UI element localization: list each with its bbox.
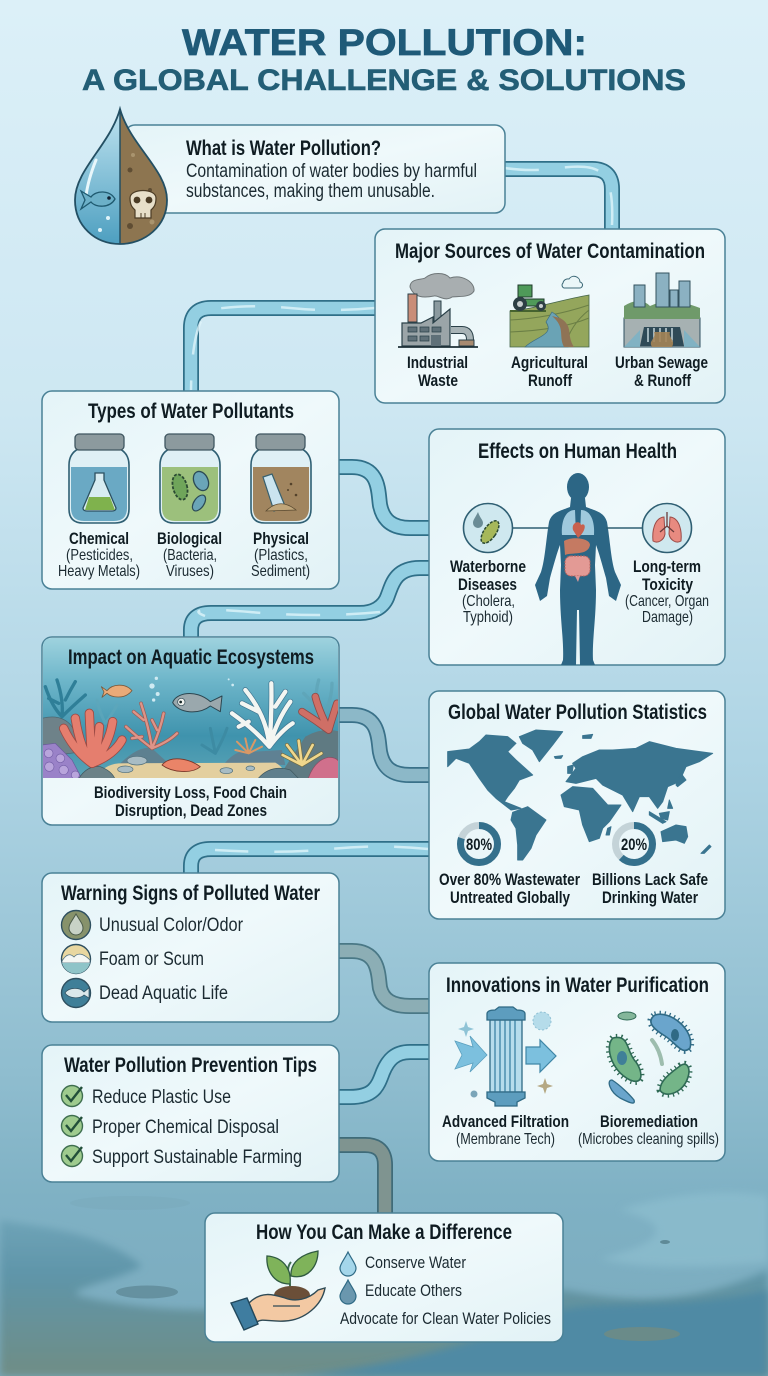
- pipe: sources to types: [191, 306, 378, 394]
- pipe: tips to difference: [336, 1145, 385, 1216]
- stat label: wastewater: Over 80% Wastewater: [439, 870, 580, 889]
- icon: lungs circle: [606, 504, 692, 552]
- pipe: warning signs to innovations: [336, 951, 432, 1006]
- text: advocate: Advocate for Clean Water Policies: [340, 1309, 551, 1328]
- panel: aquatic ecosystems: [42, 637, 340, 825]
- label: advanced filtration: Advanced Filtration: [442, 1112, 569, 1131]
- pipe: health to ecosystems: [191, 568, 432, 640]
- label: biological: [157, 529, 222, 580]
- label: advanced filtration: [442, 1112, 569, 1148]
- icon: urban sewage: [624, 273, 700, 347]
- icon: half clean half polluted water drop: [75, 109, 167, 244]
- pipe: ecosystems to statistics: [336, 715, 432, 775]
- icon: dark drop: [340, 1280, 356, 1304]
- label: biological: (Bacteria,: [163, 547, 217, 564]
- heading: health: Effects on Human Health: [478, 440, 677, 463]
- label: waterborne diseases: [450, 557, 526, 626]
- panel: types of pollutants: [42, 391, 339, 589]
- chart: 20 percent donut: 20%: [621, 835, 647, 854]
- label: long-term toxicity: (Cancer, Organ: [625, 593, 709, 610]
- heading: warning signs: Warning Signs of Polluted Water: [61, 882, 320, 905]
- label: waterborne diseases: Waterborne: [450, 557, 526, 576]
- panel: statistics: [429, 691, 725, 919]
- label: physical: Physical: [253, 529, 309, 548]
- heading: statistics: Global Water Pollution Statistics: [448, 701, 707, 724]
- text: farming: Support Sustainable Farming: [92, 1147, 302, 1168]
- panel: human health: [429, 429, 725, 665]
- label: agricultural runoff: Runoff: [528, 371, 572, 390]
- label: chemical: [58, 529, 140, 580]
- text: dead life: Dead Aquatic Life: [99, 983, 228, 1004]
- icon: bioremediation microbes: [609, 1012, 691, 1103]
- icon: hand holding seedling: [231, 1251, 325, 1330]
- label: urban sewage: & Runoff: [634, 371, 691, 390]
- caption: biodiversity: [94, 783, 287, 820]
- caption: biodiversity: Disruption, Dead Zones: [115, 801, 267, 820]
- icon: light drop: [340, 1252, 356, 1276]
- stat label: drinking water: Drinking Water: [602, 888, 698, 907]
- label: industrial waste: Industrial: [407, 353, 468, 372]
- panel: warning signs: [42, 873, 339, 1022]
- icon: check: [62, 1146, 82, 1166]
- icon: foam: [62, 944, 90, 974]
- heading: difference: How You Can Make a Difference: [256, 1221, 512, 1244]
- label: chemical: Chemical: [69, 529, 129, 548]
- heading: types: Types of Water Pollutants: [88, 400, 294, 423]
- label: physical: [251, 529, 310, 580]
- stat label: drinking water: Billions Lack Safe: [592, 870, 708, 889]
- label: waterborne diseases: Diseases: [458, 575, 517, 594]
- pipe: statistics to warning signs: [191, 846, 432, 876]
- chart: 20 percent donut: [616, 826, 652, 862]
- caption: biodiversity: Biodiversity Loss, Food Chain: [94, 783, 287, 802]
- panel: major sources: [375, 229, 725, 403]
- icon: biological jar: [160, 434, 220, 523]
- label: physical: Sediment): [251, 563, 310, 580]
- title: WATER POLLUTION:: [182, 22, 587, 63]
- label: biological: Viruses): [166, 563, 214, 580]
- pipe: tips to innovations: [336, 1052, 432, 1097]
- text: conserve: Conserve Water: [365, 1253, 466, 1272]
- icon: murky drop: [62, 910, 90, 940]
- pipe: types to health: [336, 467, 432, 528]
- icon: chemical jar: [69, 434, 129, 523]
- label: bioremediation: (Microbes cleaning spills): [578, 1131, 719, 1148]
- label: waterborne diseases: (Cholera,: [462, 593, 515, 610]
- label: biological: Biological: [157, 529, 222, 548]
- definition text: substances, making them unusable.: [186, 181, 435, 202]
- icon: waterborne disease circle: [464, 504, 550, 552]
- label: long-term toxicity: [625, 557, 709, 626]
- stat label: wastewater: Untreated Globally: [450, 888, 570, 907]
- icon: agricultural runoff: [510, 276, 589, 347]
- label: long-term toxicity: Damage): [642, 609, 693, 626]
- chart: 80 percent donut: [460, 826, 498, 862]
- label: physical: (Plastics,: [254, 547, 308, 564]
- label: urban sewage: [615, 353, 708, 390]
- icon: membrane filter with arrows: [455, 1007, 556, 1106]
- title: [82, 22, 686, 97]
- icon: dead fish: [62, 978, 90, 1008]
- label: bioremediation: [578, 1112, 719, 1148]
- panel: prevention tips: [42, 1045, 339, 1182]
- label: advanced filtration: (Membrane Tech): [456, 1131, 555, 1148]
- chart: 80 percent donut: 80%: [466, 835, 492, 854]
- text: plastic: Reduce Plastic Use: [92, 1087, 231, 1108]
- stat label: wastewater: [439, 870, 580, 907]
- pipe: definition to sources: [500, 167, 612, 232]
- panel: innovations: [429, 963, 725, 1161]
- label: agricultural runoff: [511, 353, 588, 390]
- text: educate: Educate Others: [365, 1281, 462, 1300]
- label: industrial waste: [407, 353, 468, 390]
- label: bioremediation: Bioremediation: [600, 1112, 698, 1131]
- panel: make a difference: [205, 1213, 563, 1342]
- text: foam: Foam or Scum: [99, 949, 204, 970]
- label: waterborne diseases: Typhoid): [463, 609, 513, 626]
- label: long-term toxicity: Toxicity: [642, 575, 693, 594]
- icon: physical jar: [251, 434, 311, 523]
- label: long-term toxicity: Long-term: [633, 557, 701, 576]
- chart: world map: [448, 730, 713, 860]
- label: chemical: (Pesticides,: [66, 547, 133, 564]
- label: industrial waste: Waste: [418, 371, 458, 390]
- heading: what is water pollution: What is Water Pollution?: [186, 137, 381, 160]
- icon: check: [62, 1086, 82, 1106]
- icon: check: [62, 1116, 82, 1136]
- heading: tips: Water Pollution Prevention Tips: [64, 1054, 317, 1077]
- label: chemical: Heavy Metals): [58, 563, 140, 580]
- label: urban sewage: Urban Sewage: [615, 353, 708, 372]
- label: agricultural runoff: Agricultural: [511, 353, 588, 372]
- icon: factory: [398, 274, 478, 347]
- definition text: [186, 161, 477, 202]
- definition text: Contamination of water bodies by harmful: [186, 161, 477, 182]
- text: color odor: Unusual Color/Odor: [99, 915, 244, 936]
- heading: innovations: Innovations in Water Purification: [446, 974, 709, 997]
- icon: human body with organs: [535, 473, 621, 665]
- panel: what is water pollution: [125, 125, 505, 213]
- text: disposal: Proper Chemical Disposal: [92, 1117, 279, 1138]
- title: A GLOBAL CHALLENGE & SOLUTIONS: [82, 64, 686, 97]
- heading: ecosystems: Impact on Aquatic Ecosystems: [68, 646, 314, 669]
- illustration: coral reef: [42, 677, 340, 782]
- stat label: drinking water: [592, 870, 708, 907]
